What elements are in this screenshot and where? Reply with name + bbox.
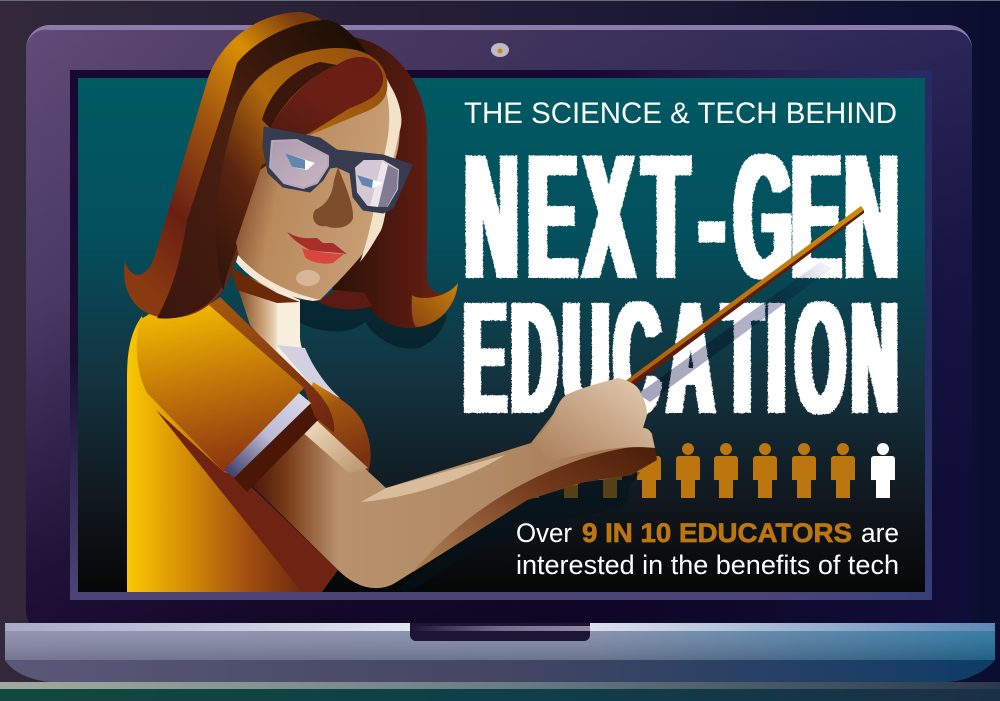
left lens — [270, 140, 328, 188]
upper arm — [241, 378, 657, 588]
sleeve — [137, 297, 334, 478]
hair: left outer — [124, 12, 345, 318]
neck — [232, 270, 338, 398]
headline line two: EDUCATION — [464, 269, 898, 447]
shoulder strap — [156, 410, 338, 592]
left eye — [285, 153, 315, 170]
glasses — [263, 127, 412, 213]
teacher — [124, 12, 864, 592]
person 5 — [676, 443, 700, 498]
screen bezel — [70, 70, 932, 600]
hair: right back — [300, 36, 458, 328]
nose — [313, 167, 353, 228]
person 4 — [637, 443, 661, 498]
character shadow — [295, 300, 640, 592]
desk strip — [0, 682, 1000, 689]
shirt collar — [277, 345, 340, 398]
face rim light — [360, 76, 401, 262]
sleeve top band — [209, 297, 334, 433]
heading: next-gen education — [464, 116, 899, 447]
caption line one: 9 IN 10 EDUCATORS — [582, 518, 852, 548]
right lens — [356, 161, 398, 206]
hair tip — [412, 283, 458, 327]
screen — [78, 78, 925, 592]
face — [236, 72, 401, 301]
person 2 — [559, 443, 583, 498]
right eye — [357, 175, 383, 188]
base lower — [5, 660, 995, 682]
person 9 — [831, 443, 855, 498]
base upper — [5, 623, 995, 660]
person 6 — [714, 443, 738, 498]
hinge notch — [410, 623, 590, 641]
pointer shadow — [638, 262, 833, 402]
forearm shadow — [395, 472, 640, 592]
caption line one: are — [861, 518, 899, 548]
base highlight — [5, 623, 995, 631]
caption — [516, 518, 899, 580]
webcam — [491, 43, 509, 57]
lower lip — [302, 248, 344, 264]
lens shade — [378, 165, 398, 207]
shirt body — [127, 316, 322, 592]
forearm highlight — [361, 455, 505, 502]
hand — [533, 378, 655, 463]
person 7 — [753, 443, 777, 498]
caption line one: Over — [516, 518, 572, 548]
person 1 — [520, 443, 544, 498]
jaw rim — [236, 255, 320, 301]
person 3 — [598, 443, 622, 498]
desk — [0, 689, 1000, 701]
caption line two: interested in the benefits of tech — [516, 550, 899, 580]
arm — [234, 378, 657, 588]
hair: front sweep — [216, 48, 387, 290]
forearm underside — [413, 447, 657, 572]
person 8 — [792, 443, 816, 498]
upper arm shadow — [234, 403, 322, 492]
lips — [287, 232, 347, 264]
neck shadow — [230, 267, 300, 303]
pictogram: 9 in 10 people — [520, 443, 895, 498]
lens glare — [370, 161, 388, 207]
sleeve hem — [224, 393, 311, 478]
chin highlight — [296, 270, 320, 286]
hair shadow — [295, 300, 447, 349]
person 10: white — [871, 443, 895, 498]
arm highlight — [300, 417, 368, 473]
pointer stick — [612, 206, 864, 396]
heading: eyebrow: THE SCIENCE & TECH BEHIND — [464, 97, 897, 130]
hair: dark layer — [157, 20, 368, 319]
upper lip — [287, 232, 347, 254]
shirt chest — [305, 382, 371, 473]
headline line one: NEXT-GEN — [465, 116, 899, 316]
laptop base — [0, 623, 1000, 701]
